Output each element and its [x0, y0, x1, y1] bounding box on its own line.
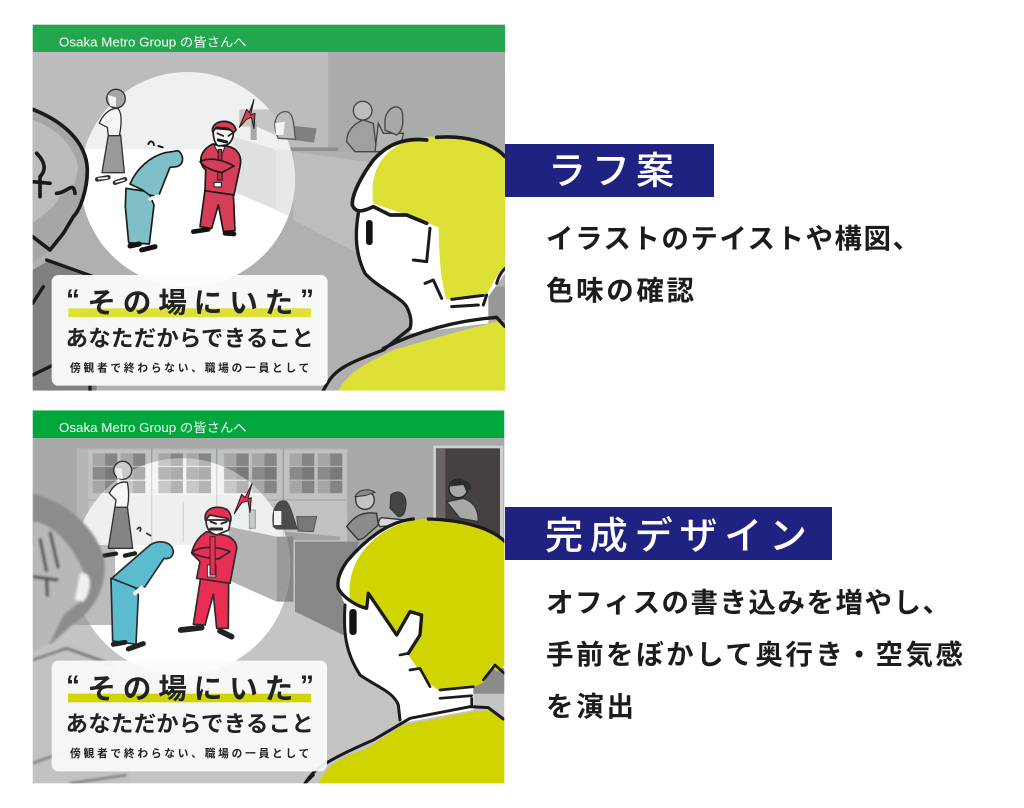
anger lightning bolt icon	[234, 484, 252, 514]
title card: その場にいた	[87, 673, 293, 705]
text block: finished design description: 手前をぼかして奥行き・空気感	[546, 639, 963, 670]
coworkers at desk and in doorway	[273, 479, 478, 540]
bystander woman	[104, 461, 135, 556]
spotlight circle	[82, 458, 290, 661]
background office	[33, 25, 505, 391]
title card: “	[66, 284, 80, 315]
text block: rough draft description	[546, 223, 920, 306]
title card: あなただからできること	[66, 326, 314, 351]
foreground person right	[305, 518, 505, 783]
panel: finished design illustration	[33, 410, 505, 783]
title card: ”	[300, 284, 314, 315]
text block: finished design description: オフィスの書き込みを増やし、	[546, 587, 950, 618]
anger lightning bolt icon	[239, 99, 255, 128]
heading: rough draft label	[505, 144, 714, 197]
bystander woman	[97, 89, 125, 183]
text block: rough draft description: イラストのテイストや構図、	[546, 223, 920, 254]
header bar	[33, 25, 505, 52]
background office with cabinets and door	[33, 410, 504, 783]
heading: finished design label: 完成デザイン	[545, 516, 807, 558]
section: rough draft caption	[505, 144, 920, 306]
title card: 傍観者で終わらない、職場の一員として	[70, 747, 309, 760]
text block: finished design description: を演出	[546, 691, 634, 722]
header bar: Osaka Metro Group の皆さんへ	[59, 35, 247, 49]
foreground person right	[323, 137, 505, 391]
spotlight circle	[83, 72, 295, 275]
text block: finished design description	[546, 587, 963, 722]
text block: rough draft description: 色味の確認	[546, 275, 694, 306]
angry man in red	[193, 121, 241, 234]
header bar: Osaka Metro Group の皆さんへ	[59, 421, 247, 435]
title card: ”	[300, 669, 314, 700]
header bar	[33, 410, 504, 438]
panel: rough draft illustration	[33, 25, 505, 391]
title card	[52, 275, 328, 386]
title card: “	[66, 669, 80, 700]
bowing man	[111, 527, 173, 649]
title card: その場にいた	[87, 288, 293, 320]
foreground person left	[33, 109, 97, 391]
bowing man	[125, 141, 183, 250]
title card: あなただからできること	[66, 712, 314, 737]
foreground blurred person left	[33, 495, 130, 783]
title card: 傍観者で終わらない、職場の一員として	[70, 361, 309, 374]
angry man in red	[181, 507, 237, 637]
title card	[52, 661, 327, 771]
heading: finished design label	[505, 507, 832, 560]
section: finished design caption	[505, 507, 963, 722]
coworkers at desk	[275, 101, 403, 152]
heading: rough draft label: ラフ案	[548, 151, 674, 193]
